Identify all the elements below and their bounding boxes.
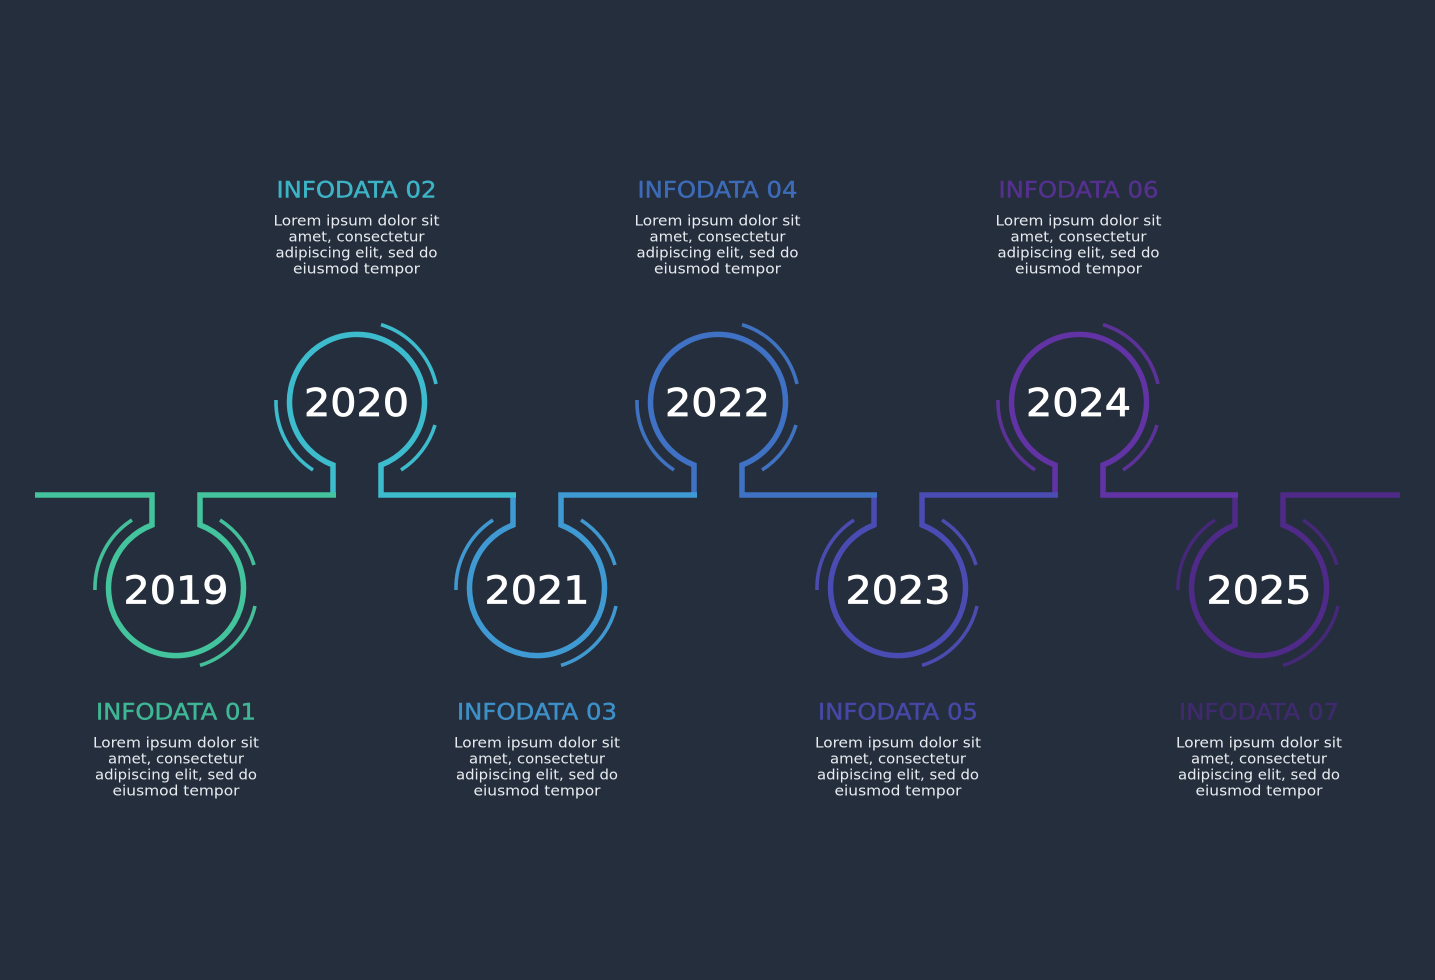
description 02: Lorem ipsum dolor sit <box>274 214 440 230</box>
description 03 <box>454 736 621 800</box>
connector ring 2021 <box>470 495 697 656</box>
description 06: adipiscing elit, sed do <box>998 246 1160 262</box>
description 07: eiusmod tempor <box>1196 784 1323 800</box>
heading 05: INFODATA 05 <box>818 699 978 725</box>
description 07: amet, consectetur <box>1191 752 1327 768</box>
accent arcs 2019 <box>95 520 255 665</box>
description 05: Lorem ipsum dolor sit <box>815 736 982 752</box>
description 02: eiusmod tempor <box>293 262 420 278</box>
description 03: Lorem ipsum dolor sit <box>454 736 621 752</box>
accent arcs 2025 <box>1178 520 1338 665</box>
description 06: eiusmod tempor <box>1015 262 1142 278</box>
connector ring 2023 <box>830 495 1058 656</box>
description 05: amet, consectetur <box>830 752 966 768</box>
timeline unit 2020 <box>274 177 516 495</box>
description 04: Lorem ipsum dolor sit <box>634 214 801 230</box>
description 03: eiusmod tempor <box>474 784 601 800</box>
timeline unit 2021 <box>454 495 697 800</box>
description 01: eiusmod tempor <box>112 784 240 800</box>
description 02 <box>274 214 440 278</box>
timeline unit 2025 <box>1176 495 1400 800</box>
description 05: adipiscing elit, sed do <box>817 768 979 784</box>
description 07 <box>1176 736 1343 800</box>
connector ring 2024 <box>1011 334 1238 495</box>
description 04: eiusmod tempor <box>654 262 781 278</box>
heading 06: INFODATA 06 <box>998 177 1158 203</box>
heading 01: INFODATA 01 <box>96 699 256 725</box>
timeline unit 2024 <box>996 177 1238 495</box>
description 06 <box>996 214 1162 278</box>
heading 04: INFODATA 04 <box>638 177 798 203</box>
description 05: eiusmod tempor <box>834 784 962 800</box>
timeline unit 2019 <box>35 495 336 800</box>
timeline unit 2023 <box>815 495 1058 800</box>
description 07: Lorem ipsum dolor sit <box>1176 736 1343 752</box>
description 07: adipiscing elit, sed do <box>1178 768 1340 784</box>
description 03: adipiscing elit, sed do <box>456 768 618 784</box>
year 2025: 2025 <box>1206 568 1312 614</box>
year 2020: 2020 <box>304 381 409 426</box>
description 01: Lorem ipsum dolor sit <box>93 736 260 752</box>
accent arcs 2020 <box>276 325 436 470</box>
year 2024: 2024 <box>1026 381 1131 426</box>
accent arcs 2024 <box>998 325 1158 470</box>
year 2022: 2022 <box>665 381 770 426</box>
heading 02: INFODATA 02 <box>276 177 436 203</box>
heading 03: INFODATA 03 <box>457 699 617 725</box>
description 04 <box>634 214 801 278</box>
connector ring 2020 <box>290 334 516 495</box>
description 04: adipiscing elit, sed do <box>636 246 798 262</box>
heading 07: INFODATA 07 <box>1179 699 1339 725</box>
accent arcs 2022 <box>637 325 797 470</box>
accent arcs 2021 <box>456 520 616 665</box>
description 06: amet, consectetur <box>1010 230 1147 246</box>
description 02: adipiscing elit, sed do <box>276 246 438 262</box>
connector ring 2025 <box>1192 495 1400 656</box>
description 04: amet, consectetur <box>650 230 786 246</box>
description 01: amet, consectetur <box>108 752 244 768</box>
description 01: adipiscing elit, sed do <box>95 768 257 784</box>
description 02: amet, consectetur <box>288 230 425 246</box>
connector ring 2022 <box>650 334 877 495</box>
description 03: amet, consectetur <box>469 752 605 768</box>
year 2019: 2019 <box>124 568 228 614</box>
description 01 <box>93 736 260 800</box>
year 2023: 2023 <box>846 568 950 614</box>
year 2021: 2021 <box>484 568 590 614</box>
accent arcs 2023 <box>817 520 977 665</box>
connector ring 2019 <box>35 495 336 656</box>
description 06: Lorem ipsum dolor sit <box>996 214 1162 230</box>
description 05 <box>815 736 982 800</box>
timeline unit 2022 <box>634 177 877 495</box>
